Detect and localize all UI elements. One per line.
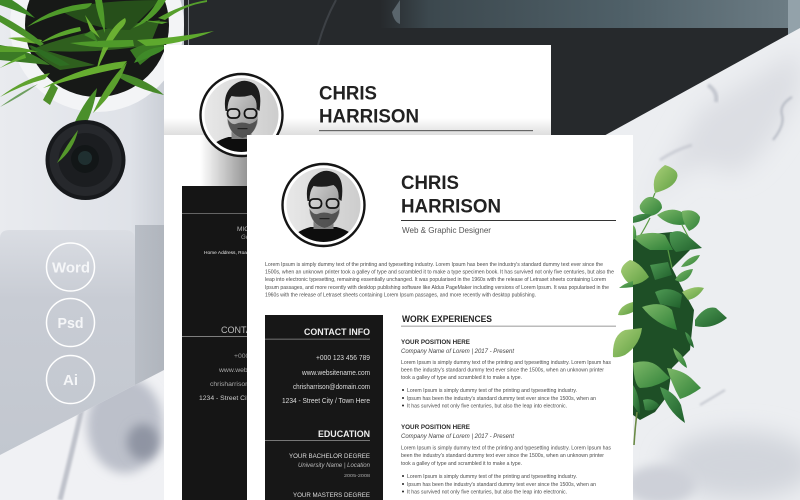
contact info: +000 123 456 789	[316, 355, 370, 362]
work entry 1: been the industry's standard dummy text ever since the 1500s, when an unknown printer	[401, 368, 604, 374]
intro paragraph: Ipsum passages, and more recently with desktop publishing software like Aldus PageMaker including versions of Lorem Ipsum. It was popularised in the	[265, 285, 609, 291]
badge: Psd	[46, 298, 94, 346]
work entry 1: It has survived not only five centuries, but also the leap into electronic.	[407, 404, 567, 410]
education: 2005-2008	[344, 473, 370, 479]
intro paragraph: 1500s, when an unknown printer took a galley of type and scrambled it to make a type specimen book. It has survived not only five centuries, but also the	[265, 270, 614, 276]
work entry 1: took a galley of type and scrambled it to make a type.	[401, 375, 522, 381]
work entry 1: YOUR POSITION HERE	[401, 339, 471, 346]
name and title	[401, 173, 616, 235]
front resume page	[247, 135, 633, 500]
education: EDUCATION	[318, 429, 370, 439]
intro paragraph	[265, 262, 614, 298]
back name: HARRISON	[319, 106, 419, 128]
intro paragraph: Lorem Ipsum is simply dummy text of the printing and typesetting industry. Lorem Ipsum has been the industry's standard dummy text ever since the	[265, 262, 603, 268]
back portrait	[200, 74, 282, 156]
work entry 1: Ipsum has been the industry's standard dummy text ever since the 1500s, when an	[407, 396, 596, 402]
badge: Ai	[46, 356, 94, 404]
sidebar panel	[265, 315, 383, 500]
camera lens	[46, 120, 126, 200]
back sidebar: 1234 - Street City	[199, 395, 252, 402]
name and title: HARRISON	[401, 196, 501, 218]
back sidebar: Home Address, Road	[204, 250, 250, 256]
name and title: Web & Graphic Designer	[402, 225, 491, 235]
badge: Word: Word	[52, 260, 90, 276]
back resume page	[164, 45, 551, 500]
contact info: 1234 - Street City / Town Here	[282, 398, 370, 405]
contact info: CONTACT INFO	[304, 327, 370, 337]
intro paragraph: 1960s with the release of Letraset sheets containing Lorem Ipsum passages, and more recently with desktop publishing.	[265, 292, 536, 298]
back sidebar: www.website	[218, 367, 259, 374]
back sidebar: MICHAEL	[237, 226, 266, 233]
back sidebar	[182, 186, 266, 500]
work entry 1	[401, 339, 611, 410]
background: marble right	[606, 28, 800, 500]
front portrait	[282, 164, 364, 246]
work entry 2: Lorem Ipsum is simply dummy text of the printing and typesetting industry.	[407, 474, 577, 480]
work entry 2: Lorem Ipsum is simply dummy text of the printing and typesetting industry. Lorem Ipsum has	[401, 446, 611, 452]
back sidebar: Ge	[241, 235, 250, 241]
plant pot with grass	[0, 0, 214, 167]
work entry 1: Lorem Ipsum is simply dummy text of the printing and typesetting industry.	[407, 388, 577, 394]
work entry 1: Company Name of Lorem | 2017 - Present	[401, 348, 515, 355]
contact info: chrisharrison@domain.com	[293, 384, 370, 391]
work entry 2: been the industry's standard dummy text ever since the 1500s, when an unknown printer	[401, 453, 604, 459]
badge: Word	[46, 243, 94, 291]
contact info	[282, 327, 370, 405]
work entry 2: Ipsum has been the industry's standard dummy text ever since the 1500s, when an	[407, 482, 596, 488]
badge: Psd: Psd	[58, 315, 84, 332]
education: YOUR BACHELOR DEGREE	[289, 453, 371, 460]
dark foliage mass	[633, 232, 694, 420]
leaves	[613, 165, 727, 423]
intro paragraph: leap into electronic typesetting, remaining essentially unchanged. It was popularised in the 1960s with the release of Letraset sheets containing Lorem	[265, 277, 606, 283]
work entry 2	[401, 424, 611, 496]
background: tablet and grey panel left	[0, 225, 164, 460]
work entry 1: Lorem Ipsum is simply dummy text of the printing and typesetting industry. Lorem Ipsum has	[401, 360, 611, 366]
work experiences heading: WORK EXPERIENCES	[402, 314, 492, 324]
back sidebar: CONTACT	[221, 325, 264, 335]
work entry 2: It has survived not only five centuries, but also the leap into electronic.	[407, 490, 567, 496]
work entry 2: YOUR POSITION HERE	[401, 424, 471, 431]
name and title: CHRIS	[401, 173, 459, 194]
education	[289, 429, 371, 499]
back sidebar: chrisharrison	[210, 381, 249, 388]
education: YOUR MASTERS DEGREE	[293, 492, 371, 499]
work entry 2: Company Name of Lorem | 2017 - Present	[401, 433, 515, 440]
dark background blades	[0, 0, 165, 70]
back name: CHRIS	[319, 84, 377, 104]
contact info: www.websitename.com	[301, 370, 370, 377]
badge: Ai: Ai	[63, 372, 78, 389]
education: University Name | Location	[298, 462, 370, 469]
back sidebar: +000	[234, 353, 250, 360]
background: dark leather folder	[184, 0, 800, 200]
format badges	[46, 243, 94, 404]
background: marble left	[0, 360, 164, 500]
work entry 2: took a galley of type and scrambled it to make a type.	[401, 461, 522, 467]
basil plant	[613, 165, 727, 445]
grass blades	[0, 0, 214, 167]
back name	[319, 84, 419, 128]
